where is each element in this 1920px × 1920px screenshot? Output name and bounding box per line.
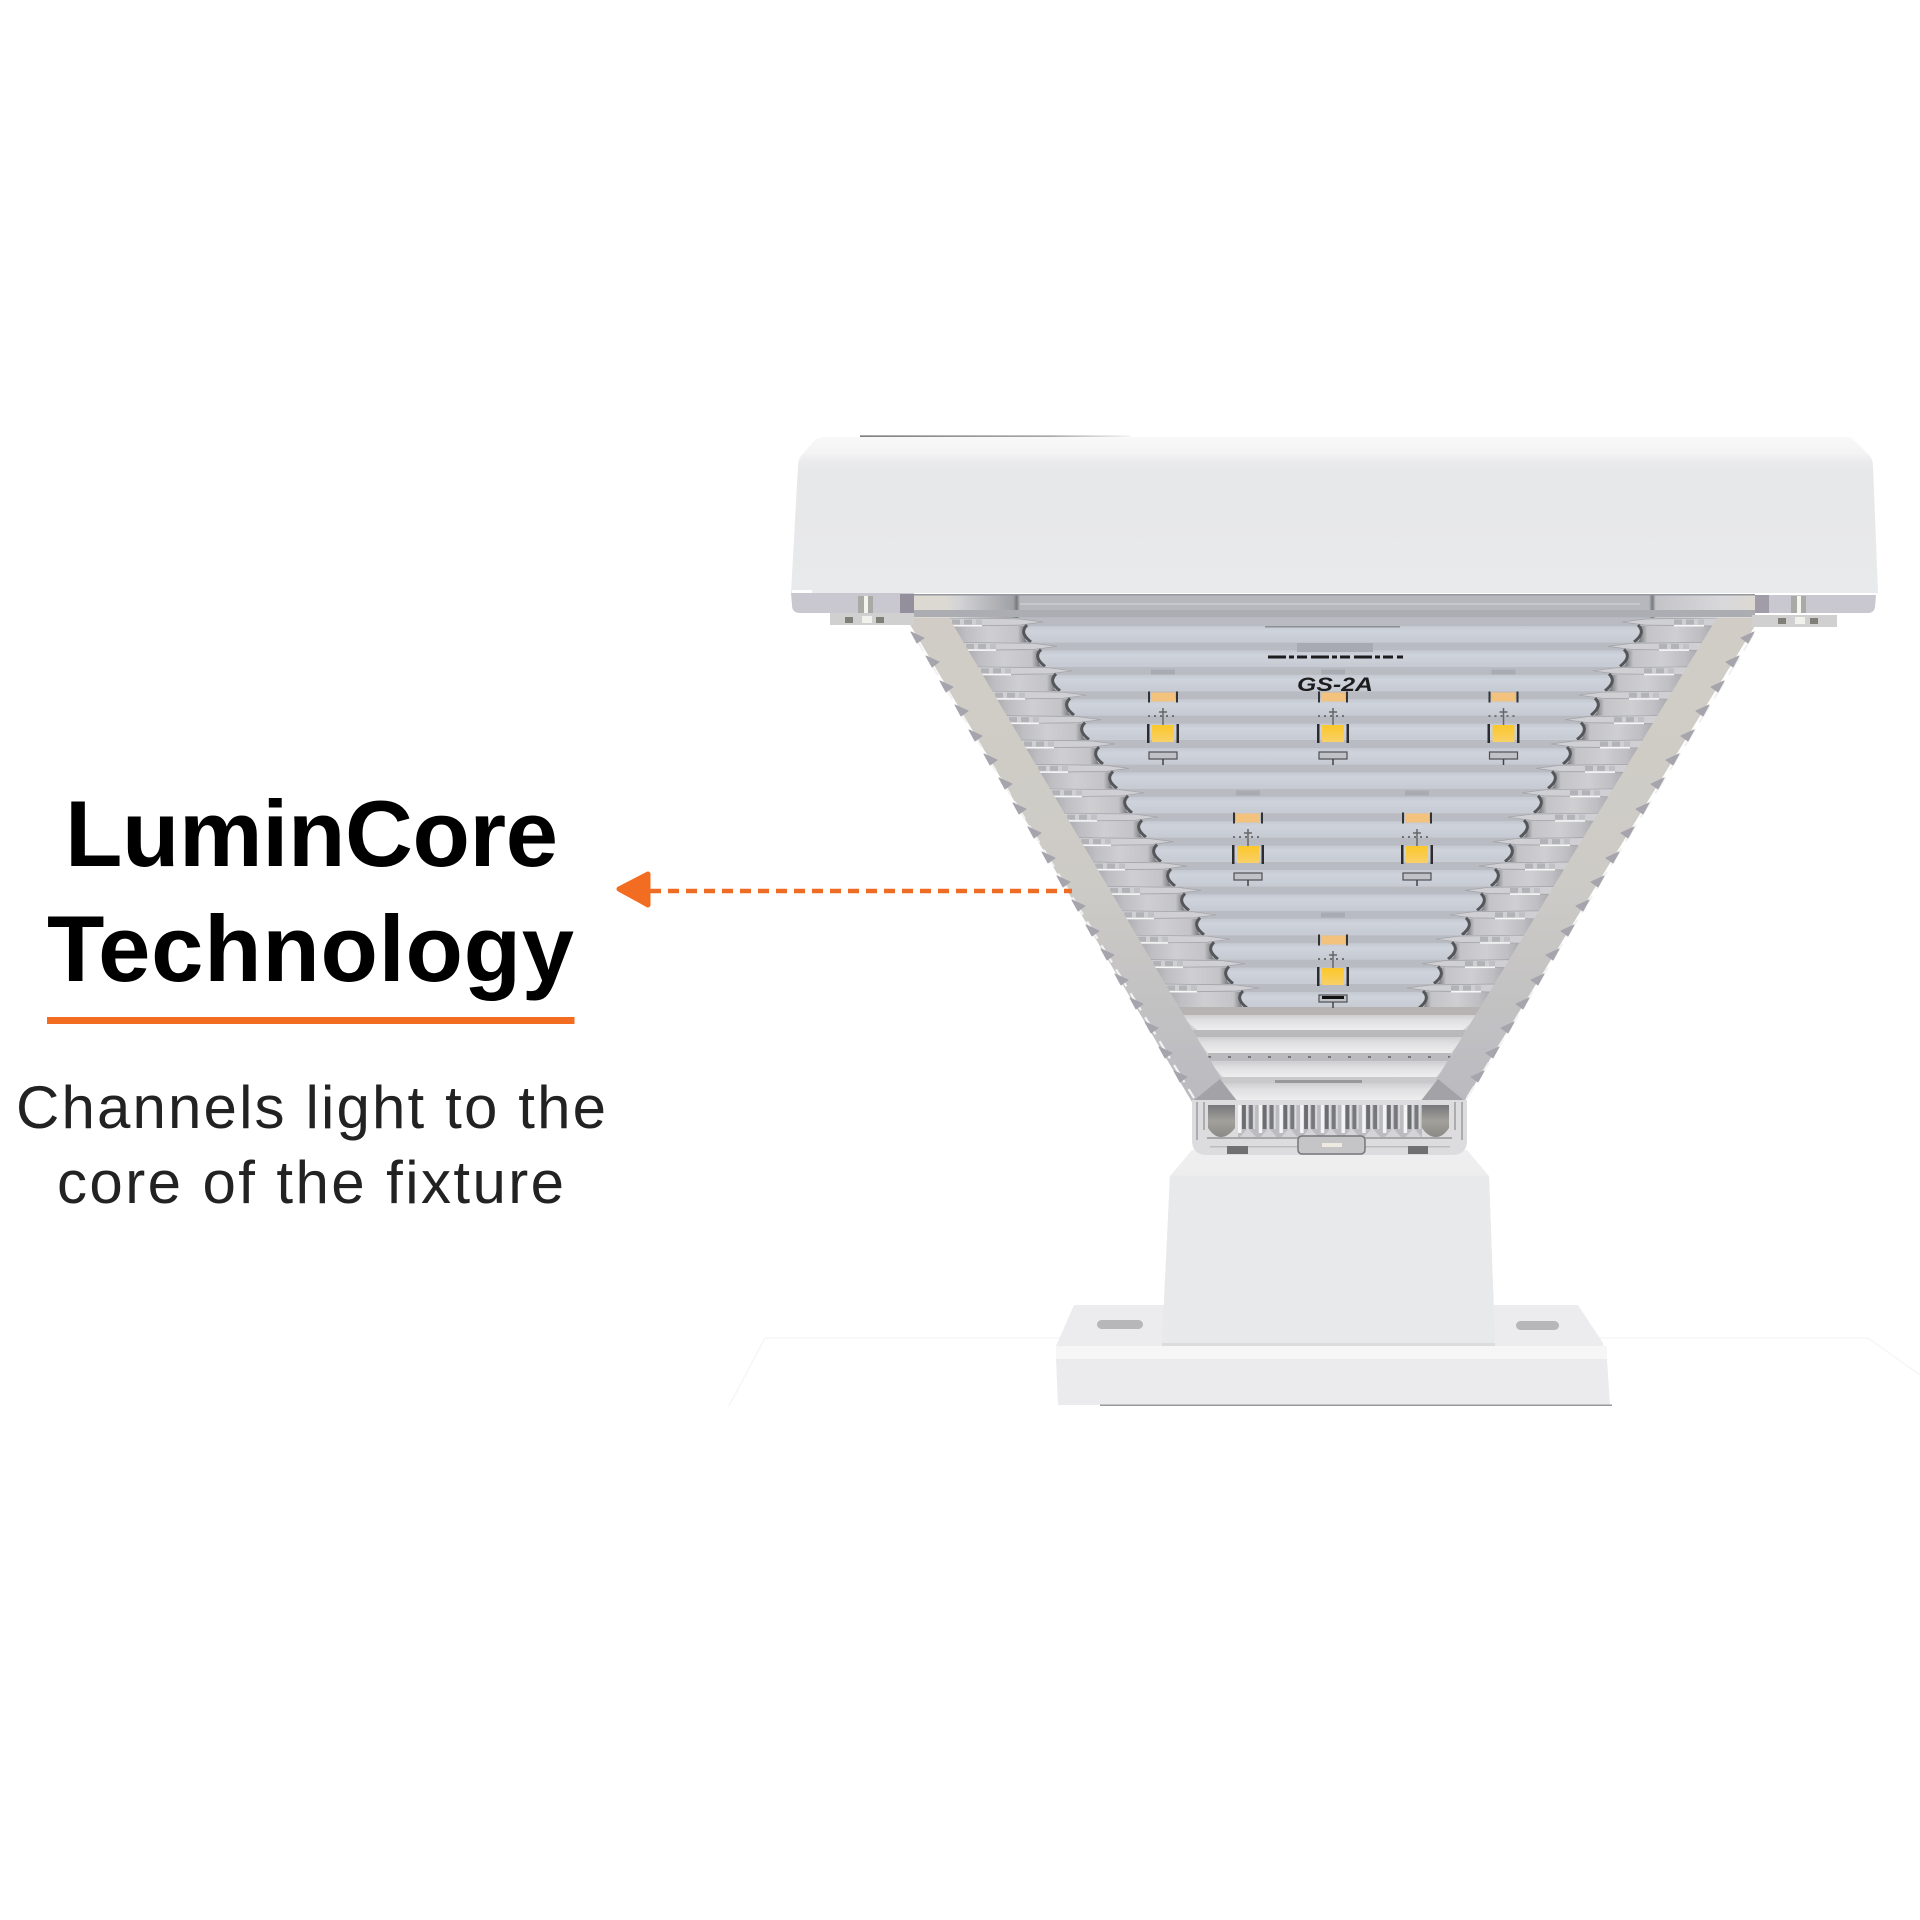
LED top row centre bbox=[1317, 670, 1349, 765]
band corner shade left bbox=[1192, 1079, 1238, 1102]
serrated edge teeth right bbox=[1471, 632, 1754, 1082]
LED top row left bbox=[1147, 670, 1179, 765]
LED bottom row black minus mark bbox=[1322, 996, 1344, 999]
mounting screw right bbox=[1752, 596, 1837, 627]
lens body base fill bbox=[948, 617, 1718, 1082]
white edge highlights bbox=[913, 634, 1754, 1098]
heading: LuminCore bbox=[65, 781, 558, 886]
orange heading underline bbox=[47, 1017, 574, 1024]
serrated edge teeth left bbox=[911, 632, 1187, 1082]
table surface edge bbox=[729, 1338, 1920, 1406]
LED middle row right bbox=[1401, 790, 1433, 886]
LED middle row left bbox=[1232, 790, 1264, 886]
PCB printed marking: GS-2A bbox=[1297, 675, 1373, 696]
mounting screw left bbox=[830, 596, 914, 625]
LED top row right bbox=[1488, 670, 1520, 765]
PCB printed marking bbox=[1265, 626, 1403, 696]
description bbox=[16, 1074, 606, 1216]
post collar bbox=[1162, 1150, 1495, 1343]
solar cap housing bbox=[791, 436, 1878, 593]
base plate bbox=[1056, 1176, 1612, 1406]
description: Channels light to the bbox=[16, 1074, 606, 1141]
description: core of the fixture bbox=[57, 1149, 564, 1216]
clear gasket strip under housing bbox=[791, 593, 1876, 618]
lens ribs and LED board strips bbox=[948, 618, 1718, 1008]
product: solar post light bbox=[791, 436, 1878, 1406]
callout arrow bbox=[619, 874, 1072, 905]
clear collar with teeth bbox=[1192, 1100, 1467, 1155]
heading bbox=[47, 781, 574, 1001]
lower clear lens ribs bbox=[1177, 1007, 1481, 1100]
beige reflector band left bbox=[905, 616, 1222, 1102]
LED bottom row bbox=[1317, 912, 1349, 1008]
heading: Technology bbox=[47, 896, 574, 1001]
band corner shade right bbox=[1420, 1079, 1466, 1102]
beige reflector band right bbox=[1436, 616, 1761, 1102]
